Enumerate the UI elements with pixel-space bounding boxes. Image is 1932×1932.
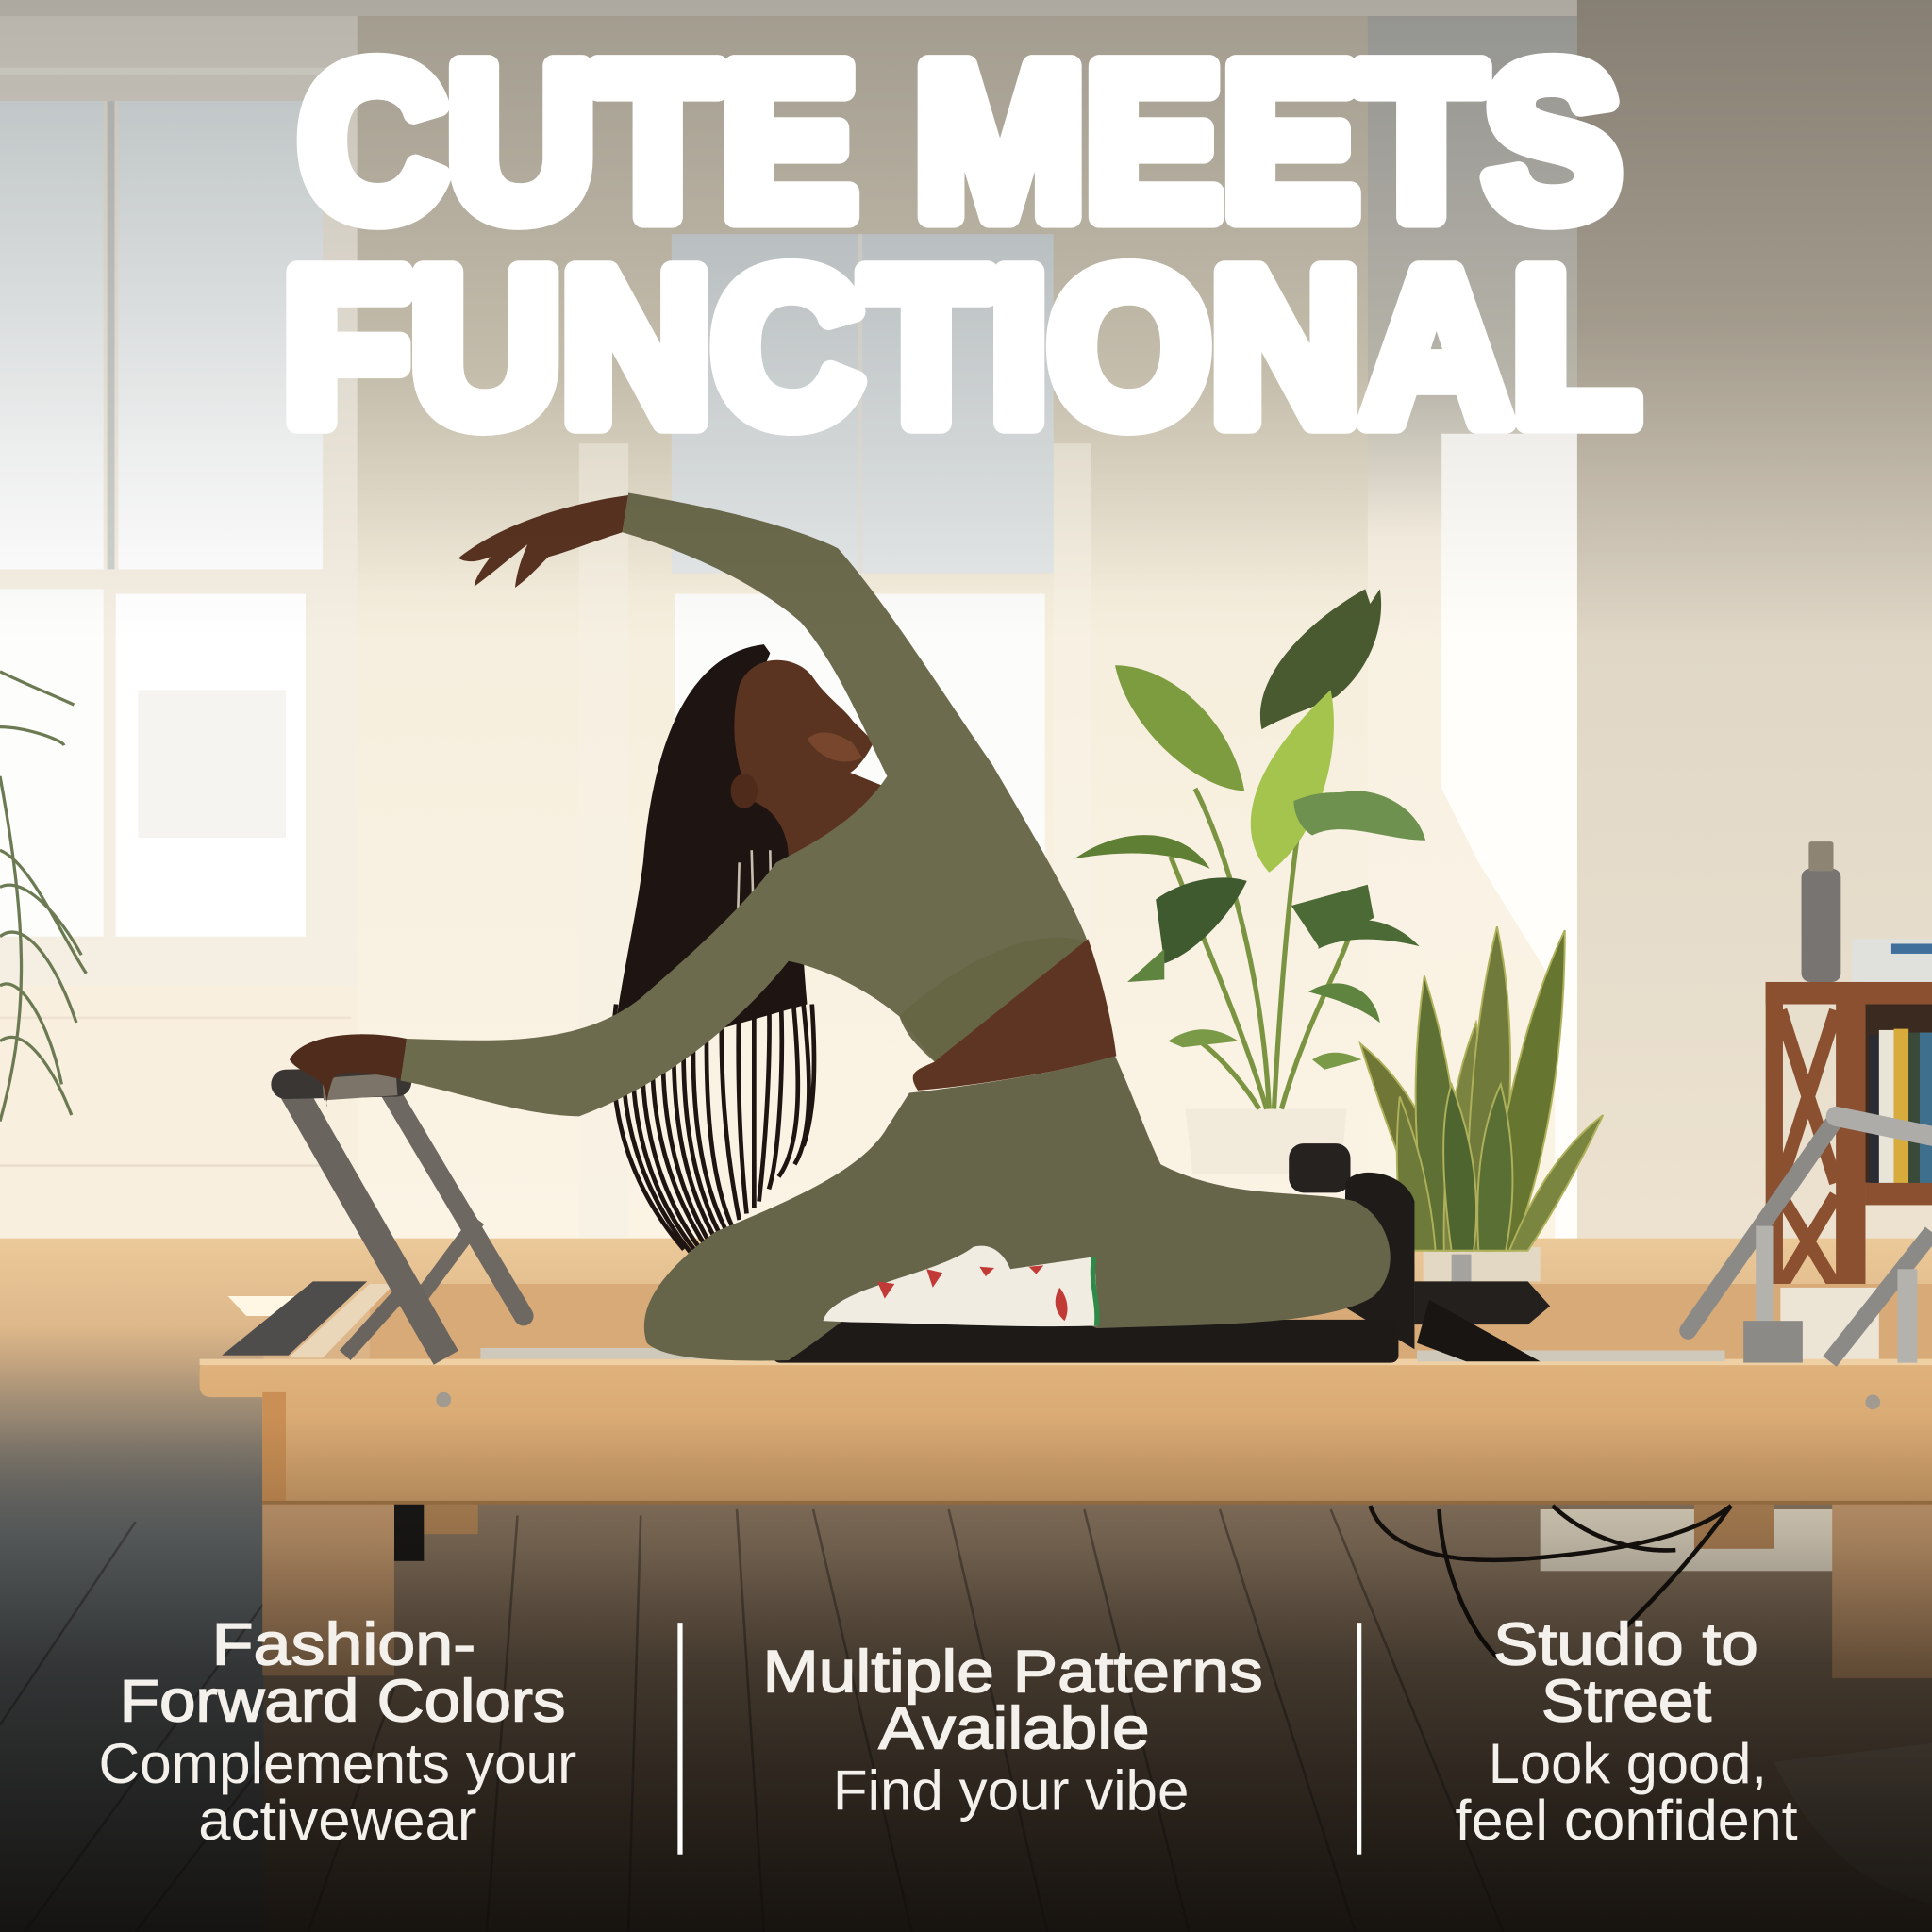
crop top xyxy=(400,492,1088,1116)
front legs xyxy=(262,1497,394,1675)
feature: studio to street: Street xyxy=(1541,1669,1711,1735)
overlay: top dark gradient xyxy=(0,0,1932,641)
title xyxy=(283,20,1640,470)
leggings xyxy=(644,1056,1391,1360)
neck and face xyxy=(734,660,890,860)
reformer: left handle frame xyxy=(286,1082,524,1357)
shelf frame xyxy=(1766,982,1932,1004)
plant: snake plant xyxy=(1360,926,1603,1281)
feature: fashion-forward colors: Fashion- xyxy=(212,1612,475,1678)
feature: studio to street: feel confident xyxy=(1456,1789,1798,1852)
floor xyxy=(0,1239,1932,1932)
reformer: wooden frame xyxy=(200,1281,1932,1678)
figure: woman stretching on reformer xyxy=(290,492,1391,1360)
hair upper xyxy=(612,644,808,1059)
back legs xyxy=(407,1497,478,1534)
panel: corner wall with sunlight xyxy=(1368,0,1577,1281)
overlay: bottom dark gradient xyxy=(0,1417,1932,1932)
reformer: shoulder rests and carriage pad xyxy=(773,1143,1550,1363)
ear xyxy=(731,774,758,808)
far rail xyxy=(370,1284,1932,1360)
panel: right wall xyxy=(1577,0,1932,1288)
bookshelf with bottle and books xyxy=(1766,841,1932,1296)
bottle xyxy=(1802,869,1840,982)
feature: fashion-forward colors: Complements your xyxy=(98,1732,576,1795)
midriff xyxy=(913,939,1116,1091)
hair braids xyxy=(613,986,814,1252)
feature: fashion-forward colors: activewear xyxy=(198,1789,476,1852)
feature: multiple patterns available: Available xyxy=(878,1695,1150,1761)
plant: tall bird of paradise xyxy=(1074,589,1425,1174)
divider left xyxy=(677,1623,683,1855)
plant: left palm xyxy=(0,672,86,1122)
feature: studio to street xyxy=(1456,1612,1798,1852)
divider right xyxy=(1357,1623,1361,1855)
resting hand xyxy=(290,1034,407,1107)
books on shelf top xyxy=(1852,939,1932,983)
hair highlights xyxy=(737,850,789,955)
feature: fashion-forward colors xyxy=(98,1612,576,1852)
panel: left window xyxy=(0,0,358,1239)
leaf: middle dark xyxy=(1156,877,1247,963)
photo: studio room background xyxy=(0,0,1932,1288)
feature: multiple patterns available: Multiple Patterns xyxy=(762,1639,1263,1705)
shelf interior xyxy=(1865,1004,1932,1183)
reformer: right handle frame xyxy=(1688,1116,1932,1363)
cables under the reformer xyxy=(1370,1506,1731,1657)
title: FUNCTIONAL xyxy=(283,225,1640,470)
title: CUTE MEETS xyxy=(299,20,1621,264)
raised hand xyxy=(458,495,628,588)
sock xyxy=(823,1246,1099,1326)
leaf: upper left xyxy=(1115,665,1244,791)
feature: multiple patterns available: Find your vibe xyxy=(833,1759,1189,1823)
leaf: bright centre xyxy=(1251,690,1334,873)
feature: studio to street: Look good, xyxy=(1489,1732,1767,1795)
feature: studio to street: Studio to xyxy=(1493,1612,1758,1678)
leaf: right xyxy=(1293,791,1425,841)
leaf: left low xyxy=(1074,835,1210,869)
panel: centre wall and window xyxy=(358,0,1099,1239)
leaf: top dark xyxy=(1260,589,1381,729)
feature: multiple patterns available xyxy=(762,1639,1263,1823)
main beam xyxy=(200,1361,1932,1503)
feature: fashion-forward colors: Forward Colors xyxy=(120,1669,566,1735)
